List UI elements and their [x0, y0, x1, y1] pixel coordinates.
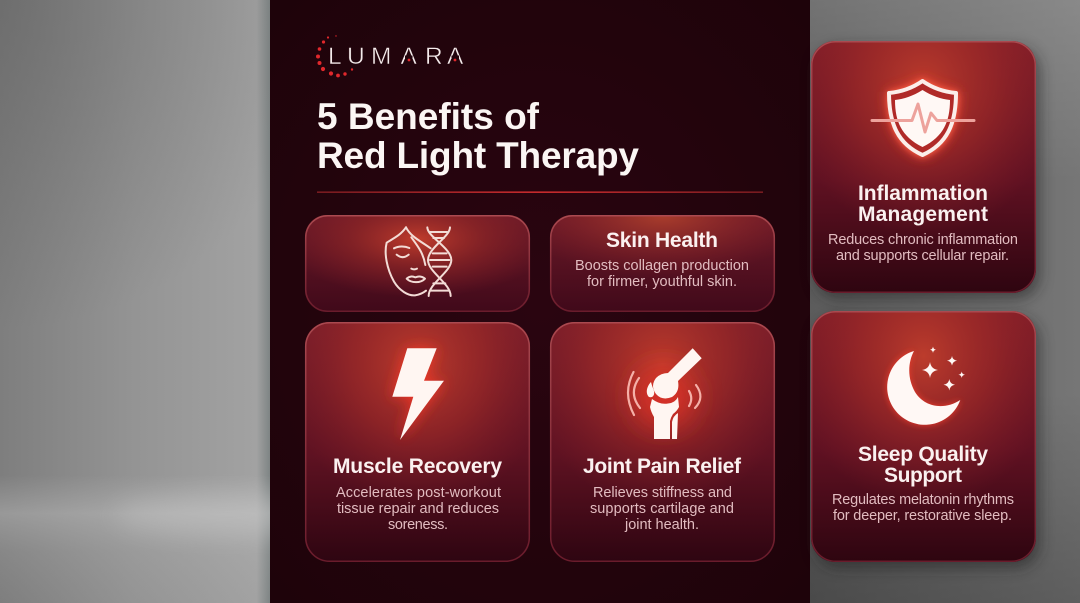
card: Inflammation Management	[811, 41, 1040, 299]
logo dots ring	[316, 35, 353, 77]
stars	[922, 346, 965, 390]
background: studio wall left	[0, 0, 335, 603]
text: Joint Pain Relief description: Relieves stiffness and	[593, 485, 732, 501]
card: Muscle Recovery	[305, 322, 530, 562]
text: Inflammation description: Reduces chronic inflammation	[828, 232, 1018, 248]
text: Skin Health description: Boosts collagen production	[575, 258, 749, 274]
text: Sleep Quality description: for deeper, restorative sleep.	[833, 508, 1012, 524]
fibula	[672, 413, 678, 439]
femur	[653, 348, 702, 398]
panel: main dark poster	[270, 0, 810, 603]
heading: Inflammation Management: Inflammation	[858, 182, 988, 205]
icon: shield with pulse	[872, 79, 974, 157]
text: Joint Pain Relief description	[590, 485, 734, 533]
heading: Sleep Quality Support	[858, 443, 988, 487]
text: Skin Health description	[575, 258, 749, 290]
icon: knee joint	[628, 348, 702, 439]
heading: Inflammation Management: Management	[858, 203, 988, 226]
title divider	[317, 192, 763, 193]
text: Sleep Quality description: Regulates melatonin rhythms	[832, 492, 1014, 508]
pulse line	[872, 104, 974, 132]
text: Sleep Quality description	[832, 492, 1014, 524]
text: Inflammation description: and supports cellular repair.	[836, 248, 1009, 264]
text: Muscle Recovery description	[336, 485, 501, 533]
background: studio wall right	[810, 0, 1080, 603]
text: Joint Pain Relief description: joint health.	[624, 517, 699, 533]
icon: face and DNA helix	[386, 227, 451, 296]
heading: Muscle Recovery: Muscle Recovery	[333, 455, 502, 478]
logo accent marks	[405, 56, 459, 61]
text: Inflammation description	[828, 232, 1018, 264]
text: Joint Pain Relief description: supports cartilage and	[590, 501, 734, 517]
card: Sleep Quality Support	[811, 311, 1040, 568]
title: 5 Benefits of	[317, 96, 540, 137]
heading: Joint Pain Relief: Joint Pain Relief	[583, 455, 742, 478]
heading: Skin Health: Skin Health	[606, 229, 718, 252]
heading: Sleep Quality Support: Support	[884, 464, 962, 487]
icon: lightning bolt	[392, 348, 444, 440]
text: Muscle Recovery description: Accelerates post-workout	[336, 485, 501, 501]
card: face and DNA icon	[305, 215, 530, 312]
pain waves	[628, 372, 700, 415]
text: Muscle Recovery description: tissue repair and reduces	[337, 501, 499, 517]
text: Muscle Recovery description: soreness.	[388, 517, 448, 533]
title	[317, 96, 639, 176]
tibia	[650, 397, 679, 439]
card: Skin Health	[550, 215, 775, 312]
icon: crescent moon and stars	[887, 346, 965, 425]
title: Red Light Therapy	[317, 135, 639, 176]
card: Joint Pain Relief	[550, 322, 775, 562]
heading: Sleep Quality Support: Sleep Quality	[858, 443, 988, 466]
heading: Inflammation Management	[858, 182, 988, 226]
patella	[647, 382, 654, 397]
logo wordmark: LUMARA	[328, 43, 464, 70]
logo: Lumara	[316, 35, 464, 77]
text: Skin Health description: for firmer, youthful skin.	[587, 274, 737, 290]
